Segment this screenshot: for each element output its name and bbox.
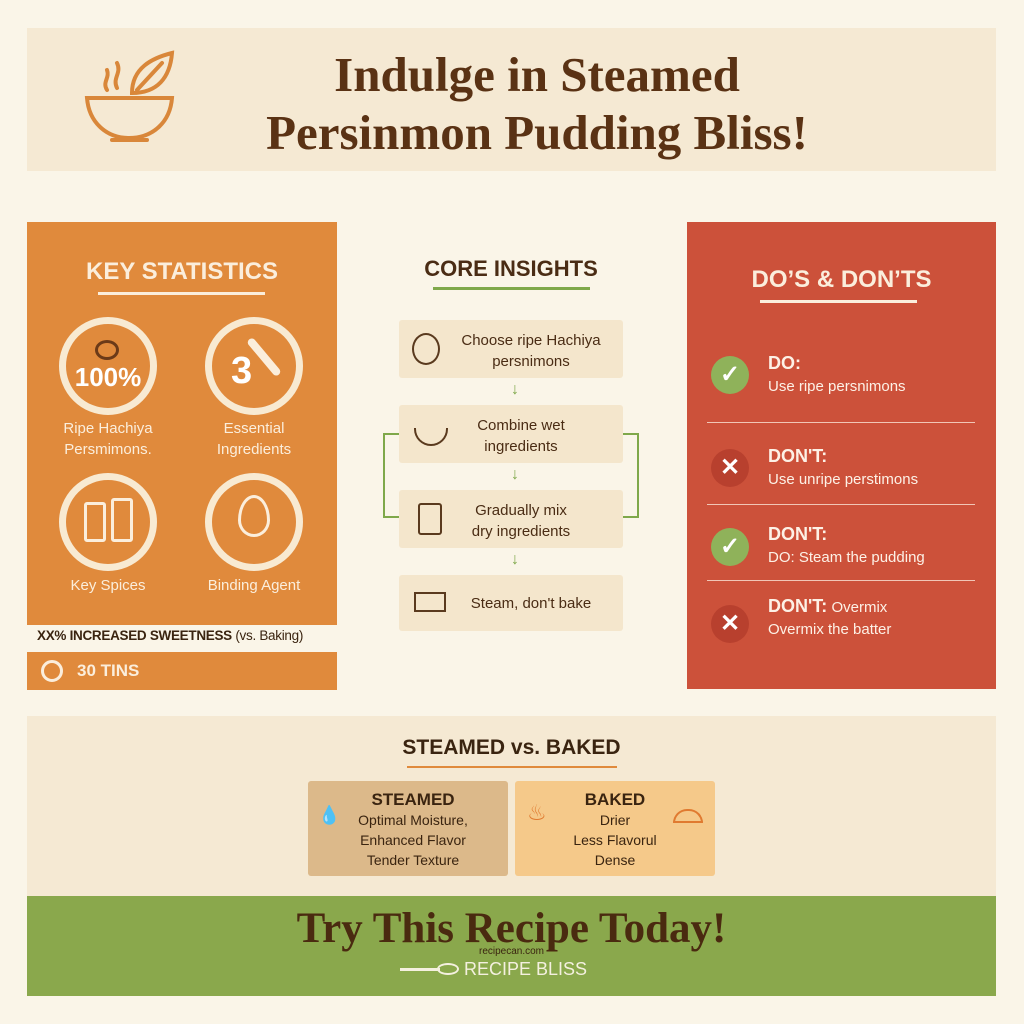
stats: Persmimons. [64, 441, 152, 458]
item: overmix: Overmix the batter [768, 621, 891, 638]
step 1: Choose ripe Hachiya [461, 332, 601, 349]
card: steamed: STEAMED [371, 790, 455, 809]
heading: CORE INSIGHTS [424, 256, 598, 281]
bar: time: 30 TINS [77, 661, 139, 680]
stats: 3 [231, 350, 252, 392]
arrow: ↓ [511, 466, 519, 483]
item: steam [711, 524, 925, 566]
stats: Ripe Hachiya [63, 420, 153, 437]
item: steam: ✓ [720, 533, 740, 560]
item: dont unripe: DON'T: [768, 446, 827, 466]
step 4: Steam, don't bake [471, 595, 591, 612]
arrow: ↓ [511, 551, 519, 568]
stats: Essential [224, 420, 284, 437]
card: baked: ♨ [527, 800, 547, 825]
step 3: dry ingredients [472, 523, 570, 540]
step 1 [399, 320, 623, 378]
card: steamed [308, 781, 508, 876]
heading: KEY STATISTICS [86, 258, 278, 285]
card: steamed: Tender Texture [367, 852, 459, 868]
card: baked: BAKED [585, 790, 645, 809]
item: steam: DO: Steam the pudding [768, 549, 925, 566]
card: steamed: Optimal Moisture, [358, 812, 468, 828]
brand: RECIPE BLISS [464, 959, 587, 979]
item: overmix: DON'T: Overmix [768, 596, 887, 616]
header band [27, 28, 996, 171]
item: overmix [711, 596, 892, 643]
panel: steamed vs baked [27, 716, 996, 896]
stats: Binding Agent [208, 577, 300, 594]
stats: 100% [75, 362, 141, 392]
card: baked: Drier [600, 812, 630, 828]
item: do ripe: DO: [768, 353, 801, 373]
card: steamed: 💧 [318, 805, 340, 825]
footer [27, 896, 996, 996]
step 2: Combine wet [477, 417, 565, 434]
title: Persinmon Pudding Bliss! [266, 105, 808, 160]
stats: Ingredients [217, 441, 291, 458]
bar: time [27, 652, 337, 690]
item: overmix: ✕ [720, 610, 740, 637]
heading: DO’S & DON’TS [751, 266, 932, 293]
icon: bowl [84, 50, 174, 142]
step 3 [399, 490, 623, 548]
step 1: persnimons [492, 353, 570, 370]
card: baked [515, 781, 715, 876]
card: baked: Less Flavorul [573, 832, 657, 848]
url: recipecan.com [479, 946, 544, 957]
panel: dos and donts [687, 222, 996, 689]
item: steam: DON'T: [768, 524, 827, 544]
card: steamed: Enhanced Flavor [360, 832, 466, 848]
card: baked: Dense [595, 852, 635, 868]
heading: STEAMED vs. BAKED [402, 736, 621, 759]
item: do ripe [711, 353, 906, 395]
arrow: ↓ [511, 381, 519, 398]
stats: Key Spices [70, 577, 146, 594]
text: sweetness: XX% INCREASED SWEETNESS (vs. Baking) [37, 628, 303, 643]
step icons [412, 333, 440, 365]
title: Indulge in Steamed [334, 47, 740, 102]
item: dont unripe: ✕ [720, 454, 740, 481]
step 2 [399, 405, 623, 463]
step 3: Gradually mix [475, 502, 567, 519]
item: dont unripe [711, 446, 918, 488]
panel: key statistics [27, 222, 337, 690]
step 4 [399, 575, 623, 631]
item: do ripe: Use ripe persnimons [768, 378, 906, 395]
brand [400, 959, 587, 979]
cta title: Try This Recipe Today! [297, 905, 726, 952]
step 2: ingredients [484, 438, 558, 455]
stats [59, 317, 303, 594]
item: dont unripe: Use unripe perstimons [768, 471, 918, 488]
title [266, 47, 808, 160]
item: do ripe: ✓ [720, 361, 740, 388]
